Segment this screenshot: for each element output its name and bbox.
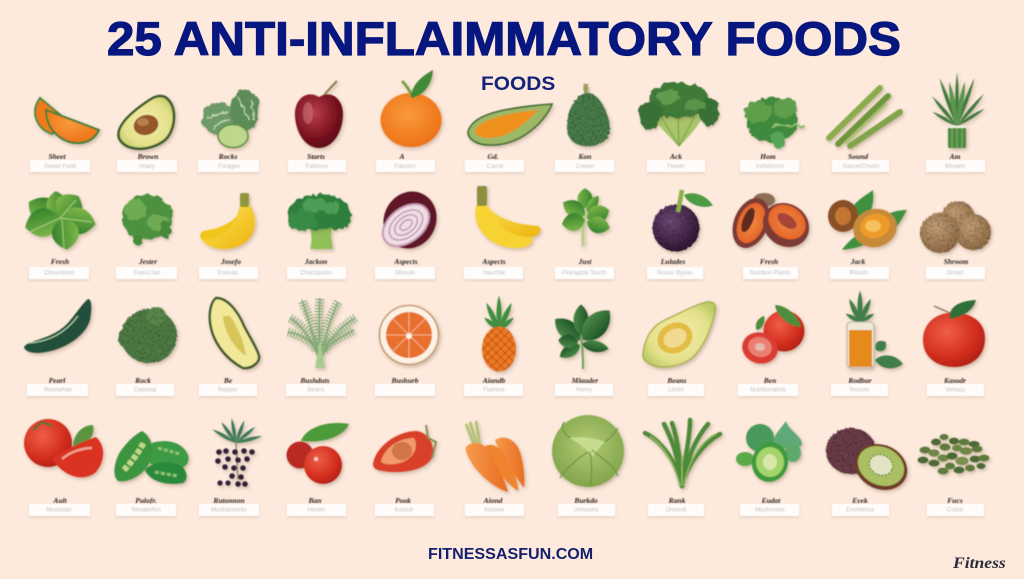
label [740, 152, 799, 172]
label: Jack [850, 257, 866, 266]
food item: basil [22, 187, 98, 279]
food item: cherries [286, 423, 349, 516]
label: Haven [307, 508, 325, 514]
icon: cabbage [552, 415, 624, 487]
icon: jar with pineapple top [845, 290, 904, 370]
food item: lettuce [198, 90, 260, 172]
icon: long melon [468, 104, 552, 145]
label: Brown [137, 152, 158, 161]
label: Am [949, 152, 961, 161]
icon: long green shoots [645, 420, 720, 486]
label [375, 257, 435, 279]
label: Aspects [481, 257, 506, 266]
label: Bushduts [299, 376, 330, 385]
label [555, 376, 613, 396]
label: Onlondt [665, 508, 687, 514]
label: Hom [759, 152, 776, 161]
food item: green seeds [918, 434, 990, 516]
icon: papaya halves [725, 193, 818, 256]
food item: papaya halves [725, 193, 818, 279]
food item: red apple [288, 81, 346, 172]
icon: leafy herbs [745, 97, 805, 148]
label: Jester [138, 257, 157, 266]
label: Gd. [487, 152, 499, 161]
food item: kale [638, 82, 719, 172]
label [927, 496, 984, 516]
label [30, 152, 90, 172]
label: Kon [578, 152, 591, 161]
label: Sweet Food [44, 164, 76, 170]
label [116, 496, 176, 516]
label [926, 152, 985, 172]
food item: orange [376, 70, 442, 172]
label [830, 257, 889, 279]
icon: plum and kiwi [826, 428, 915, 498]
icon: apple [295, 81, 343, 148]
label: Be [223, 376, 233, 385]
label: Aiandb [482, 376, 505, 385]
icon: green fruit [567, 84, 610, 146]
label: Veriacy [945, 388, 965, 394]
label: Beans [307, 388, 325, 394]
label [199, 496, 259, 516]
food item: broccoli [287, 194, 351, 279]
label [376, 152, 435, 172]
label [286, 376, 346, 396]
icon: avocado [118, 96, 174, 149]
label [199, 257, 258, 279]
icon: green leaves [549, 303, 618, 369]
food item: carrots [465, 421, 524, 516]
label: Jackon [304, 257, 327, 266]
label [199, 376, 257, 396]
label [117, 152, 177, 172]
icon: tomato and wedge [24, 419, 103, 477]
label: Lulades [660, 257, 685, 266]
icon: yellow avocado half [643, 302, 715, 367]
icon: melon wedge [35, 98, 99, 143]
icon: red tomato with leaf [923, 300, 985, 367]
label: Rutonnon [212, 496, 245, 505]
label: Rosso Ifiyuas [657, 270, 693, 276]
food item: walnuts [920, 201, 991, 279]
icon: lettuce and slice [202, 90, 260, 148]
label: Franc/Jan [134, 270, 160, 276]
label: Mlauder [571, 376, 598, 385]
icon: herb sprig [559, 188, 612, 246]
food item: dill plant [286, 298, 355, 396]
label [465, 496, 524, 516]
label: Sound [848, 152, 868, 161]
label: Pearl [49, 376, 66, 385]
food item: long melon [465, 104, 552, 172]
label [647, 152, 705, 172]
label [558, 496, 615, 516]
label: Fucs [947, 496, 963, 505]
food item: plum and kiwi [826, 428, 915, 516]
logo: Fitness: Fitness [952, 554, 1006, 572]
label: Josefo [220, 257, 241, 266]
label: Bushurb [390, 376, 419, 385]
label: Burkdo [573, 496, 598, 505]
icon: bananas [200, 193, 255, 249]
food item: grapefruit [375, 306, 438, 396]
icon: berries and rosemary [212, 418, 263, 487]
label: Mushaosonts [211, 508, 247, 514]
label: Sauce/Cream [843, 164, 879, 170]
label: Ben [763, 376, 776, 385]
icon: broccoli [288, 194, 351, 249]
food item: sapodilla [828, 190, 907, 279]
label [287, 257, 346, 279]
food item: green cabbage [552, 415, 624, 516]
label: Flower [667, 164, 685, 170]
label [116, 376, 174, 396]
food item: cucumber [24, 299, 91, 396]
label [29, 496, 90, 516]
label: Mushroves [755, 508, 785, 514]
food item: dark green fruit [555, 84, 614, 172]
food item: red onion [374, 183, 446, 279]
food item: green grass shoot [645, 420, 720, 516]
label [29, 257, 89, 279]
label: Enchiensa [846, 508, 875, 514]
label [464, 376, 523, 396]
icon: kale [638, 82, 719, 147]
label [375, 496, 434, 516]
label [198, 152, 259, 172]
food grid [22, 70, 991, 516]
label [832, 152, 889, 172]
label: Mourotan [46, 508, 72, 514]
icon: avocado slice [210, 298, 259, 368]
icon: sapodilla halves with leaves [828, 190, 907, 252]
label: Kasodr [943, 376, 966, 385]
label: Oread [947, 270, 963, 276]
label [743, 257, 798, 279]
food item: leafy herb sprig [555, 188, 614, 279]
label [831, 376, 888, 396]
food item: berries sprig [199, 418, 263, 516]
food item: parsley [116, 195, 177, 279]
label: Korsuh [394, 508, 414, 514]
label: Tecoolo [849, 388, 870, 394]
icon: green bundle [931, 72, 986, 149]
food item: dark plum [647, 190, 715, 279]
food item: orange melon wedge [30, 98, 99, 172]
food item: green fruit cluster [736, 421, 802, 516]
label: Fatiness [306, 164, 328, 170]
icon: cucumber [24, 299, 91, 353]
icon: onion [374, 183, 446, 257]
icon: pineapple [482, 296, 516, 372]
label: Rosewhan [44, 388, 72, 394]
label: Nutritionalists [750, 388, 786, 394]
label: Fresh [51, 257, 69, 266]
label: Repper [218, 388, 238, 394]
label: Pineapple Touch [562, 270, 606, 276]
label: Ault [52, 496, 68, 505]
icon: red fruit half [373, 425, 436, 472]
label: Eyek [851, 496, 868, 505]
label: Ban [308, 496, 321, 505]
label: Beans [666, 376, 687, 385]
label [116, 257, 177, 279]
label: Henry [576, 388, 592, 394]
food item: tomato with wedge [24, 419, 103, 516]
label: Flamine [483, 388, 505, 394]
label: Hauchie [483, 270, 506, 276]
label: Ritusto [850, 270, 869, 276]
label: Oatmeal [134, 388, 156, 394]
food item: broccoli floret [116, 307, 177, 396]
food item: celery [829, 88, 900, 172]
food item: avocado long slice [199, 298, 259, 396]
label: Forages [218, 164, 240, 170]
label: Resaterfon [131, 508, 161, 514]
icon: green chunks [114, 431, 189, 484]
label [465, 152, 524, 172]
icon: celery stalks [829, 88, 900, 146]
label: A [398, 152, 405, 161]
label: Coask [946, 508, 964, 514]
label [647, 257, 703, 279]
label: Enesau [218, 270, 238, 276]
label: Hoary [139, 164, 155, 170]
label: Cream [576, 164, 594, 170]
label: Kisowa [484, 508, 504, 514]
label: Lindst [668, 388, 684, 394]
label: Fresh [760, 257, 778, 266]
icon: dill plant [288, 298, 355, 368]
label [27, 376, 88, 396]
icon: pumpkin seeds [918, 434, 990, 474]
food item: oil jar [831, 290, 904, 396]
food item: red tomato [923, 300, 985, 396]
label [832, 496, 889, 516]
label: Rank [668, 496, 686, 505]
label: Rocks [218, 152, 237, 161]
food item: papaya avocado [643, 302, 715, 396]
label [287, 496, 346, 516]
label: Pook [395, 496, 411, 505]
label: Ack [669, 152, 682, 161]
icon: banana bunch [475, 186, 540, 248]
food item: green leaves [549, 303, 618, 396]
icon: red cherries with leaf [286, 423, 349, 484]
label: Sheet [48, 152, 66, 161]
label: Mesule [395, 270, 415, 276]
label: Eudat [761, 496, 781, 505]
label [555, 257, 614, 279]
subtitle: FOODS [481, 74, 555, 95]
title: 25 ANTI-INFLAIMMATORY FOODS [107, 13, 901, 66]
label: Nutrition Plants [750, 270, 790, 276]
icon: basil leaves [22, 187, 98, 251]
icon: tomato pair [739, 305, 804, 368]
food item: pineapple [464, 296, 523, 396]
food item: tomato halves [738, 305, 804, 396]
icon: green fruit cluster [736, 421, 802, 486]
label: Aspects [393, 257, 418, 266]
food item: avocado half [117, 96, 177, 172]
icon: walnuts [920, 201, 991, 253]
label: Aiond [483, 496, 503, 505]
label: Carrot [487, 164, 504, 170]
label: Unnsueiv [573, 508, 599, 514]
label [555, 152, 614, 172]
icon: carrots [466, 421, 524, 492]
label: Starts [307, 152, 325, 161]
label: Inchdroom [756, 164, 784, 170]
label [288, 152, 346, 172]
label [738, 376, 798, 396]
website footer: FITNESSASFUN.COM [428, 546, 593, 563]
label: Rock [134, 376, 151, 385]
label: Just [578, 257, 592, 266]
food item: green bundle [926, 72, 986, 172]
icon: dark plum with leaf [652, 190, 715, 252]
label [464, 257, 523, 279]
icon: grapefruit slice [380, 306, 438, 364]
label: Chockpotas [300, 270, 332, 276]
label [648, 496, 704, 516]
food item: green chunks [114, 431, 189, 516]
icon: orange with leaf [380, 70, 442, 147]
label [648, 376, 704, 396]
label: Passion [394, 164, 416, 170]
label [926, 257, 985, 279]
label: Mexam [945, 164, 965, 170]
icon: broccoli floret [118, 307, 177, 363]
food item: banana [199, 193, 258, 279]
label [740, 496, 799, 516]
label [927, 376, 984, 396]
food item: leafy herbs [740, 97, 805, 172]
label: Chivestone [44, 270, 75, 276]
label: Pulofr. [135, 496, 157, 505]
icon: parsley [121, 195, 173, 246]
food item: red fruit half [373, 425, 436, 516]
food item: banana bunch [464, 186, 540, 279]
label: Rodbur [847, 376, 872, 385]
label: Shroom [944, 257, 968, 266]
